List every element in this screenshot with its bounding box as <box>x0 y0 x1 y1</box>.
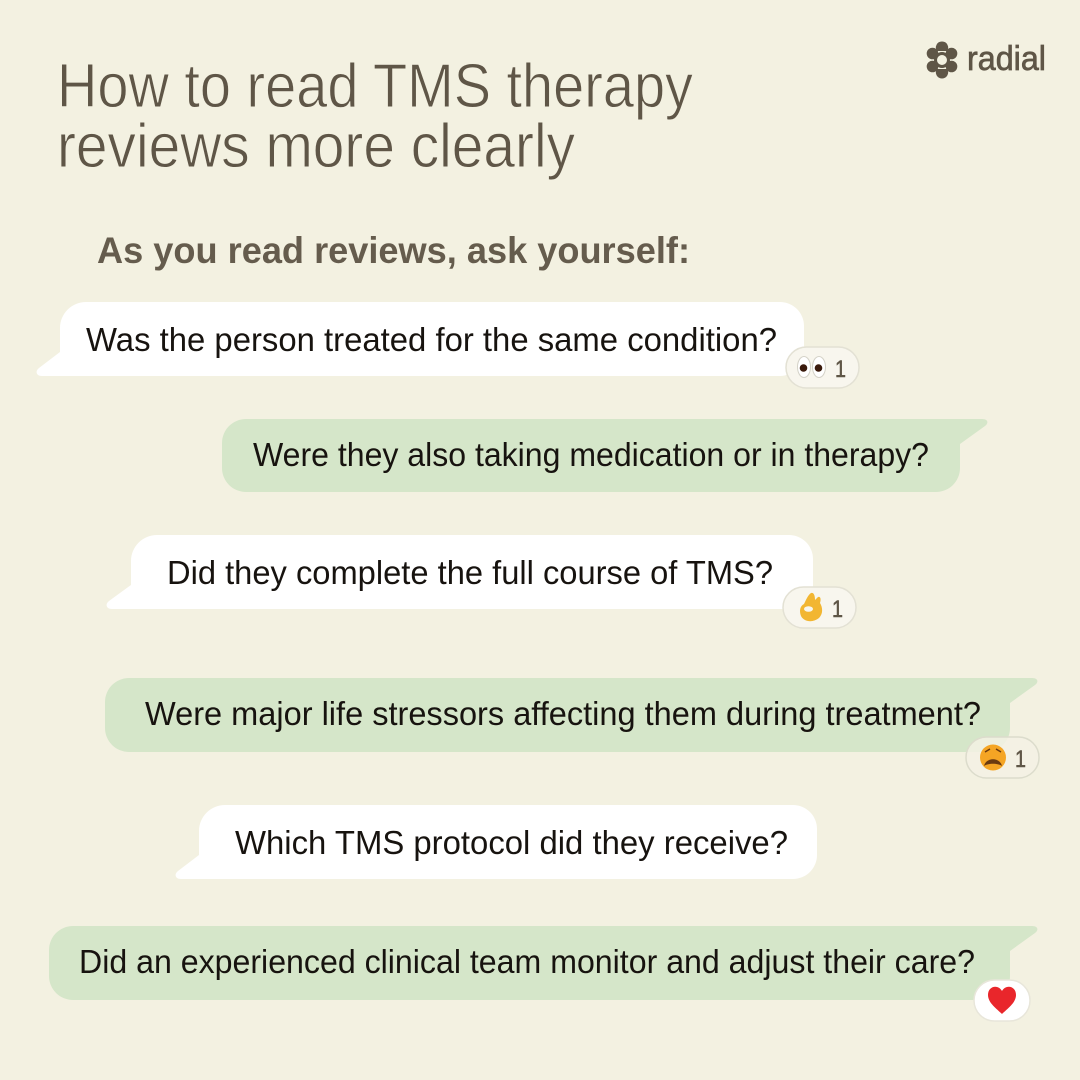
bubble 4 <box>105 678 1037 752</box>
bubble 2 <box>222 419 987 492</box>
bubble 1 <box>37 302 804 376</box>
reaction: ok hand 1: 1 <box>832 596 843 623</box>
bubble 4: Were major life stressors affecting them during treatment? <box>145 695 981 732</box>
reaction: ok hand 1 <box>783 587 856 628</box>
title: reviews more clearly <box>57 112 575 181</box>
bubble 5: Which TMS protocol did they receive? <box>235 824 788 861</box>
reaction: eyes 1 <box>786 347 859 388</box>
reaction: eyes 1: 1 <box>835 356 846 383</box>
bubble 5 <box>176 805 817 879</box>
bubble 3: Did they complete the full course of TMS? <box>167 554 773 591</box>
title <box>57 52 693 181</box>
title: How to read TMS therapy <box>57 52 693 121</box>
logo: radial <box>927 40 1046 79</box>
bubble 1: Was the person treated for the same condition? <box>86 321 777 358</box>
bubble 6 <box>49 926 1037 1000</box>
subheading: As you read reviews, ask yourself: <box>97 230 690 271</box>
bubble 2: Were they also taking medication or in therapy? <box>253 436 929 473</box>
reaction: weary face 1 <box>966 737 1039 778</box>
reaction: weary face 1: 1 <box>1015 746 1026 773</box>
logo: radial: radial <box>967 40 1046 78</box>
bubble 3 <box>107 535 813 609</box>
bubble 6: Did an experienced clinical team monitor and adjust their care? <box>79 943 975 980</box>
reaction: heart <box>974 980 1030 1021</box>
